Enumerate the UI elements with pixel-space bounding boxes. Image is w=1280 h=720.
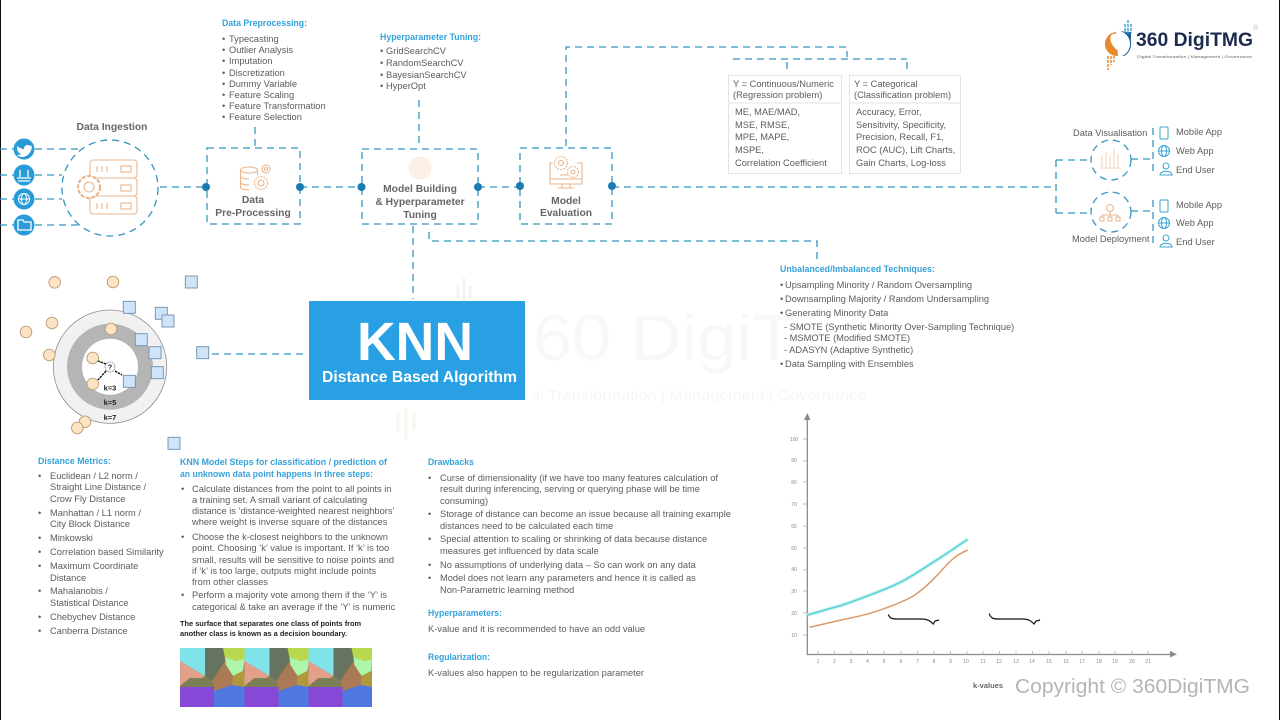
list: delivery channels (1158, 127, 1222, 247)
table: classification metrics: Sensitivity, Specificity, (856, 120, 946, 130)
panel: data ingestion (62, 122, 158, 236)
text: distance metrics: Distance Metrics: (38, 456, 111, 466)
text: distance metrics: • (38, 508, 41, 518)
table: classification metrics: Precision, Recall, F1, (856, 132, 944, 142)
text: data preprocessing: Typecasting (229, 34, 279, 44)
x axis labels: 6 (900, 659, 903, 665)
table: classification metrics (849, 76, 961, 174)
text: KNN model steps: Choose the k-closest neighbors to the unknown (192, 532, 388, 542)
text: drawbacks: consuming) (440, 496, 488, 506)
logo: 360 DigiTMG: 360 DigiTMG (1136, 30, 1253, 51)
text: distance metrics: • (38, 561, 41, 571)
watermark (398, 278, 866, 440)
text: KNN model steps (180, 457, 396, 638)
text: KNN model steps: Calculate distances from the point to all points in (192, 484, 391, 494)
label: data pre-processing: Pre-Processing (215, 208, 291, 219)
text: hyperparameter tuning: GridSearchCV (386, 46, 447, 56)
brace annotations (888, 614, 1040, 624)
text: KNN model steps: KNN Model Steps for classification / prediction of (180, 457, 388, 467)
text: distance metrics (38, 456, 164, 636)
text: KNN model steps: small, results will be sensitive to noise points and (192, 555, 394, 565)
connectors: pipeline dashed lines (0, 47, 1153, 354)
chart: decision boundary voronoi (180, 648, 372, 707)
text: KNN model steps: categorical & take an average if the ‘Y’ is numeric (192, 602, 396, 612)
list: delivery channels: Web App (1176, 218, 1214, 228)
icon: faint bars (1100, 149, 1121, 168)
table: classification metrics: Gain Charts, Log-loss (856, 158, 946, 168)
x axis labels: 16 (1063, 659, 1069, 665)
table: classification metrics: Accuracy, Error, (856, 107, 921, 117)
label: model building: Tuning (403, 210, 437, 221)
panel: data pre-processing (207, 148, 300, 224)
text: hyperparameter tuning: BayesianSearchCV (386, 70, 467, 80)
text: regularization: Regularization: (428, 652, 490, 662)
panel: data visualisation (1073, 128, 1147, 180)
text: KNN model steps: a training set. A small variant of calculating (192, 495, 367, 505)
text: data preprocessing: • (222, 101, 225, 111)
text: distance metrics: City Block Distance (50, 519, 130, 529)
text: KNN model steps: if ‘k’ is too large, outputs might include points (192, 566, 376, 576)
list: delivery channels: End User (1176, 237, 1215, 247)
diagram: k nearest neighbours: k=5 (104, 398, 116, 407)
list: delivery channels: Web App (1176, 146, 1214, 156)
table: regression metrics: Correlation Coefficient (735, 158, 827, 168)
x axis labels: 19 (1112, 659, 1118, 665)
x axis labels: 10 (963, 659, 969, 665)
text: distance metrics: Minkowski (50, 533, 93, 543)
text: drawbacks: distances need to be calculated each time (440, 521, 613, 531)
panel: KNN title (309, 301, 525, 400)
text: distance metrics: • (38, 612, 41, 622)
text: drawbacks: Curse of dimensionality (if we have too many features calculation of (440, 473, 718, 483)
text: imbalanced techniques: Generating Minority Data (785, 308, 889, 318)
x axis labels: 7 (916, 659, 919, 665)
series: upper curve (807, 539, 968, 615)
panel: model evaluation (520, 148, 612, 224)
table: classification metrics: ROC (AUC), Lift Charts, (856, 145, 955, 155)
text: hyperparameter tuning: • (380, 46, 383, 56)
text: drawbacks: • (428, 573, 431, 583)
text: distance metrics: • (38, 533, 41, 543)
list: delivery channels: End User (1176, 165, 1215, 175)
text: KNN model steps: • (181, 590, 184, 600)
text: KNN model steps: from other classes (192, 577, 268, 587)
text: distance metrics: Euclidean / L2 norm / (50, 471, 138, 481)
text: distance metrics: • (38, 626, 41, 636)
text: drawbacks: Special attention to scaling or shrinking of data because distance (440, 534, 707, 544)
table: classification metrics: Y = Categorical (854, 79, 918, 89)
y axis labels: 50 (791, 546, 797, 552)
icon: database and gears (240, 165, 270, 190)
x axis labels: 20 (1129, 659, 1135, 665)
text: data preprocessing: Imputation (229, 56, 272, 66)
text: data preprocessing: Feature Selection (229, 112, 302, 122)
text: decision boundary note: The surface that separates one class of points from (180, 619, 362, 628)
y axis labels: 60 (791, 524, 797, 530)
text: imbalanced techniques: Unbalanced/Imbalanced Techniques: (780, 264, 935, 274)
text: distance metrics: Straight Line Distance / (50, 482, 147, 492)
text: decision boundary note: another class is known as a decision boundary. (180, 629, 347, 638)
text: drawbacks (428, 457, 731, 595)
text: data preprocessing: • (222, 68, 225, 78)
x axis labels: 11 (980, 659, 986, 665)
text: distance metrics: • (38, 471, 41, 481)
y axis labels: 10 (791, 633, 797, 639)
text: drawbacks: • (428, 473, 431, 483)
axis title: k-values: k-values (973, 681, 1003, 690)
x axis labels: 15 (1046, 659, 1052, 665)
text: distance metrics: Maximum Coordinate (50, 561, 138, 571)
list: delivery channels: Mobile App (1176, 127, 1222, 137)
chart: error vs k-values (790, 413, 1177, 690)
text: imbalanced techniques (780, 264, 1014, 369)
text: hyperparameter tuning (380, 32, 481, 91)
text: KNN model steps: • (181, 484, 184, 494)
text: data preprocessing (222, 18, 326, 122)
text: hyperparameters (428, 608, 645, 634)
x axis labels: 4 (866, 659, 869, 665)
x axis labels: 13 (1013, 659, 1019, 665)
text: data preprocessing: Discretization (229, 68, 285, 78)
x axis labels (817, 659, 1151, 665)
text: imbalanced techniques: • (780, 294, 783, 304)
text: hyperparameter tuning: • (380, 70, 383, 80)
text: regularization: K-values also happen to be regularization parameter (428, 668, 644, 678)
text: imbalanced techniques: • (780, 359, 783, 369)
icons: source channels (14, 138, 34, 236)
logo: 360 DigiTMG (1105, 20, 1259, 70)
x axis labels: 2 (833, 659, 836, 665)
panel: model building (362, 149, 478, 224)
panel: model deployment (1072, 192, 1150, 244)
y axis labels: 80 (791, 480, 797, 486)
x axis labels: 12 (996, 659, 1002, 665)
text: data preprocessing: Outlier Analysis (229, 45, 293, 55)
text: distance metrics: Manhattan / L1 norm / (50, 508, 141, 518)
table: regression metrics: Y = Continuous/Numeric (733, 79, 834, 89)
table: classification metrics: (Classification problem) (854, 90, 951, 100)
table: regression metrics (728, 76, 842, 174)
y axis labels: 30 (791, 589, 797, 595)
panel: data visualisation: Data Visualisation (1073, 128, 1147, 138)
text: drawbacks: Storage of distance can become an issue because all training example (440, 509, 731, 519)
text: distance metrics: Chebychev Distance (50, 612, 135, 622)
text: distance metrics: Mahalanobis / (50, 586, 108, 596)
pipeline nodes (202, 182, 616, 191)
watermark: al Transformation | Management | Governance (531, 387, 866, 403)
label: model evaluation: Evaluation (540, 208, 592, 219)
copyright: Copyright © 360DigiTMG (1015, 676, 1250, 698)
heading: data ingestion: Data Ingestion (77, 122, 147, 133)
text: distance metrics: Distance (50, 573, 86, 583)
text: drawbacks: measures get influenced by data scale (440, 546, 599, 556)
text: distance metrics: Crow Fly Distance (50, 494, 125, 504)
text: imbalanced techniques: Upsampling Minority / Random Oversampling (785, 280, 972, 290)
y axis labels: 100 (790, 437, 798, 443)
text: hyperparameters: Hyperparameters: (428, 608, 502, 618)
icon: hierarchy (1100, 204, 1120, 221)
text: imbalanced techniques: Downsampling Majority / Random Undersampling (785, 294, 989, 304)
series: lower curve (809, 550, 968, 627)
x axis labels: 8 (933, 659, 936, 665)
dashed ingestion circle (62, 140, 158, 236)
text: hyperparameter tuning: RandomSearchCV (386, 58, 464, 68)
icon: brain (409, 157, 431, 179)
x axis labels: 5 (883, 659, 886, 665)
label: model building: & Hyperparameter (375, 197, 465, 208)
text: imbalanced techniques: • (780, 308, 783, 318)
panel: KNN title: Distance Based Algorithm (322, 369, 517, 386)
table: regression metrics: MSPE, (735, 145, 764, 155)
x axis labels: 14 (1029, 659, 1035, 665)
text: imbalanced techniques: Data Sampling with Ensembles (785, 359, 914, 369)
text: KNN model steps: where weight is inverse square of the distances (191, 517, 388, 527)
text: data preprocessing: Feature Scaling (229, 90, 294, 100)
text: data preprocessing: Data Preprocessing: (222, 18, 307, 28)
label: model evaluation: Model (551, 196, 581, 207)
x axis labels: 17 (1079, 659, 1085, 665)
text: data preprocessing: • (222, 79, 225, 89)
diagram: k nearest neighbours: k=3 (104, 384, 116, 392)
text: data preprocessing: • (222, 45, 225, 55)
text: imbalanced techniques: • (780, 280, 783, 290)
table: regression metrics: MPE, MAPE, (735, 132, 789, 142)
x axis labels: 3 (850, 659, 853, 665)
diagram: k nearest neighbours: k=7 (104, 413, 116, 422)
icon: monitor and gears (550, 156, 582, 188)
label: model building: Model Building (383, 184, 457, 195)
text: KNN model steps: • (181, 532, 184, 542)
logo: 360 DigiTMG: ® (1253, 24, 1259, 32)
x axis labels: 18 (1096, 659, 1102, 665)
x axis labels: 1 (817, 659, 820, 665)
text: drawbacks: No assumptions of underlying data – So can work on any data (440, 560, 697, 570)
text: data preprocessing: Feature Transformation (229, 101, 326, 111)
x axis labels: 9 (949, 659, 952, 665)
text: hyperparameter tuning: • (380, 81, 383, 91)
text: data preprocessing: • (222, 56, 225, 66)
table: regression metrics: (Regression problem) (733, 90, 822, 100)
text: drawbacks: • (428, 560, 431, 570)
text: imbalanced techniques: - MSMOTE (Modified SMOTE) (784, 333, 910, 343)
text: KNN model steps: Perform a majority vote among them if the ‘Y’ is (192, 590, 387, 600)
text: drawbacks: Model does not learn any parameters and hence it is called as (440, 573, 696, 583)
text: imbalanced techniques: - ADASYN (Adaptive Synthetic) (784, 345, 913, 355)
text: data preprocessing: • (222, 112, 225, 122)
watermark: 60 DigiT (533, 301, 795, 374)
text: imbalanced techniques: - SMOTE (Synthetic Minority Over-Sampling Technique) (784, 322, 1014, 332)
diagram: k nearest neighbours (20, 276, 209, 449)
text: KNN model steps: an unknown data point happens in three steps: (180, 469, 373, 479)
y axis labels: 20 (791, 611, 797, 617)
text: KNN model steps: distance is ‘distance-weighted nearest neighbors’ (192, 506, 395, 516)
panel: model deployment: Model Deployment (1072, 234, 1150, 244)
text: hyperparameter tuning: HyperOpt (386, 81, 426, 91)
y axis labels: 70 (791, 502, 797, 508)
text: KNN model steps: point. Choosing ‘k’ value is important. If ‘k’ is too (192, 543, 389, 553)
label: data pre-processing: Data (242, 195, 264, 206)
chart axes (804, 413, 1177, 658)
text: distance metrics: Canberra Distance (50, 626, 128, 636)
text: drawbacks: Non-Parametric learning method (440, 585, 574, 595)
text: hyperparameter tuning: Hyperparameter Tuning: (380, 32, 481, 42)
text: distance metrics: Statistical Distance (50, 598, 129, 608)
text: distance metrics: • (38, 586, 41, 596)
text: hyperparameters: K-value and it is recommended to have an odd value (428, 624, 645, 634)
text: regularization (428, 652, 644, 678)
panel: KNN title: KNN (357, 312, 473, 372)
list: delivery channels: Mobile App (1176, 200, 1222, 210)
text: data preprocessing: Dummy Variable (229, 79, 297, 89)
text: distance metrics: • (38, 547, 41, 557)
logo: 360 DigiTMG: Digital Transformation | Management | Governance (1137, 54, 1253, 59)
text: data preprocessing: • (222, 90, 225, 100)
icon: server and gear (78, 160, 137, 214)
text: distance metrics: Correlation based Similarity (50, 547, 164, 557)
text: drawbacks: Drawbacks (428, 457, 474, 467)
diagram: k nearest neighbours: ? (108, 364, 112, 372)
text: hyperparameter tuning: • (380, 58, 383, 68)
text: data preprocessing: • (222, 34, 225, 44)
y axis labels (790, 437, 798, 639)
y axis labels: 40 (791, 567, 797, 573)
table: regression metrics: MSE, RMSE, (735, 120, 790, 130)
text: drawbacks: • (428, 509, 431, 519)
y axis labels: 90 (791, 458, 797, 464)
text: drawbacks: • (428, 534, 431, 544)
table: regression metrics: ME, MAE/MAD, (735, 107, 800, 117)
text: drawbacks: result during inferencing, serving or querying phase will be time (440, 484, 700, 494)
x axis labels: 21 (1145, 659, 1151, 665)
